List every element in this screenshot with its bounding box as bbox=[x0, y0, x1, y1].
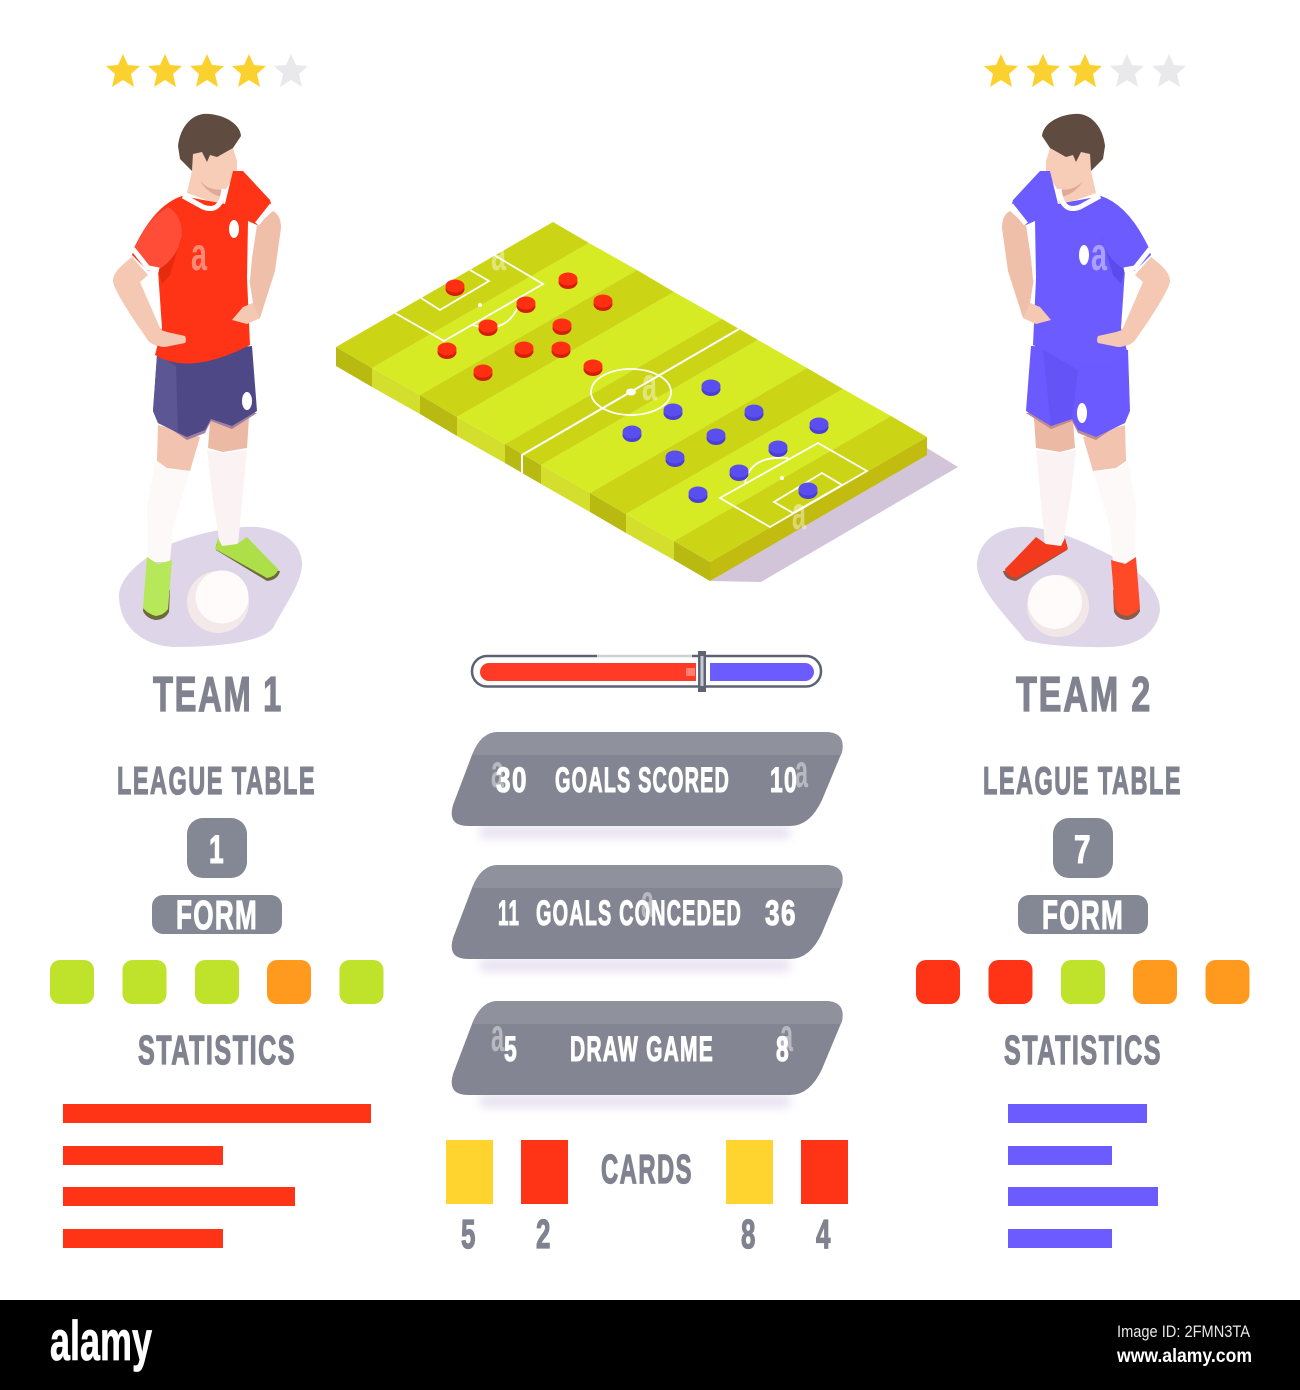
stat row: goals scored: 10 bbox=[770, 761, 798, 800]
shirt bbox=[1011, 171, 1151, 363]
heading: team 1: TEAM 1 bbox=[153, 668, 283, 722]
cards: team 2 yellow bbox=[726, 1140, 773, 1204]
arms bbox=[113, 257, 186, 346]
panel: team 1 stats bbox=[50, 760, 384, 1248]
heading: team 2: TEAM 2 bbox=[1016, 668, 1152, 722]
footer logo: alamy bbox=[50, 1309, 152, 1372]
ground shadow bbox=[977, 527, 1160, 647]
form pill bbox=[152, 892, 282, 938]
cards heading: CARDS bbox=[601, 1146, 693, 1192]
legs bbox=[1083, 425, 1126, 471]
form pill bbox=[1018, 892, 1148, 938]
pitch shadow bbox=[710, 448, 958, 582]
watermark letter on blue shirt: a bbox=[1091, 228, 1107, 280]
boots bbox=[143, 537, 280, 620]
stat row: goals scored: a bbox=[491, 745, 504, 797]
shirt bbox=[132, 171, 272, 363]
watermark letters on pitch: a bbox=[642, 358, 657, 410]
neck and face bbox=[1046, 140, 1096, 206]
pitch markings bbox=[395, 255, 867, 527]
blue team tokens bbox=[622, 380, 828, 503]
card counts: 8 bbox=[741, 1211, 757, 1257]
cards: team 1 yellow bbox=[446, 1140, 493, 1204]
pitch front side wall bbox=[336, 347, 927, 581]
stat row: draw game: a bbox=[491, 1009, 504, 1061]
stat row: goals conceded bbox=[452, 865, 843, 971]
statistics heading: STATISTICS bbox=[138, 1027, 296, 1073]
stat row: goals scored: a bbox=[795, 745, 808, 797]
cards: team 2 red bbox=[801, 1140, 848, 1204]
hair bbox=[178, 114, 241, 171]
hands on shirt bbox=[150, 303, 260, 347]
pitch grass stripes bbox=[336, 222, 927, 562]
stat row: goals conceded: GOALS CONCEDED bbox=[536, 894, 742, 933]
stat row: goals conceded: 11 bbox=[498, 894, 520, 933]
hair bbox=[1042, 114, 1105, 171]
stat row: goals conceded: a bbox=[641, 875, 654, 927]
footer bar bbox=[0, 1300, 1300, 1390]
image id: Image ID: 2FMN3TA bbox=[1117, 1322, 1251, 1341]
card counts: 2 bbox=[536, 1211, 552, 1257]
hands on shirt bbox=[1023, 303, 1133, 347]
league position badge bbox=[1053, 818, 1113, 878]
stat row: goals conceded: 36 bbox=[765, 894, 797, 933]
player: team 2 in blue kit bbox=[977, 114, 1170, 647]
form pill: FORM bbox=[1042, 892, 1124, 938]
ground shadow bbox=[119, 527, 302, 647]
stat row: draw game bbox=[452, 1001, 843, 1107]
form squares bbox=[916, 960, 1250, 1004]
card counts: 4 bbox=[816, 1211, 832, 1257]
socks bbox=[147, 462, 190, 562]
rating stars: team 2 bbox=[984, 54, 1186, 87]
figure mirrored from the team 1 pose bbox=[1002, 114, 1170, 620]
statistics bars bbox=[63, 1104, 371, 1248]
watermark letters on pitch: a bbox=[491, 228, 506, 280]
isometric football pitch with formation tokens bbox=[336, 222, 958, 582]
watermark letters on pitch: a bbox=[792, 487, 806, 539]
stat row: draw game: DRAW GAME bbox=[570, 1030, 714, 1069]
league position badge bbox=[187, 818, 247, 878]
watermark letter on red shirt: a bbox=[191, 228, 207, 280]
rating stars: team 1 bbox=[106, 54, 308, 87]
shorts bbox=[158, 410, 257, 440]
cards: team 1 red bbox=[521, 1140, 568, 1204]
ball bbox=[187, 570, 249, 633]
player: team 1 in red kit bbox=[113, 114, 302, 647]
watermark letters on pitch bbox=[491, 228, 806, 539]
socks bbox=[1093, 462, 1136, 562]
card counts bbox=[461, 1211, 832, 1257]
stat row: draw game: a bbox=[780, 1009, 793, 1061]
red team tokens bbox=[438, 272, 612, 381]
website: www.alamy.com bbox=[1116, 1346, 1252, 1367]
form squares bbox=[50, 960, 384, 1004]
league table heading: LEAGUE TABLE bbox=[117, 760, 316, 803]
legs bbox=[157, 425, 200, 471]
stat row: draw game: 8 bbox=[776, 1030, 790, 1069]
neck and face bbox=[187, 140, 237, 206]
shorts bbox=[1026, 410, 1125, 440]
ball bbox=[1027, 575, 1089, 637]
stat row: goals scored: GOALS SCORED bbox=[555, 761, 730, 800]
arms bbox=[1097, 257, 1170, 346]
boots bbox=[1003, 537, 1140, 620]
stat row: goals scored: 30 bbox=[496, 761, 528, 800]
league position badge: 7 bbox=[1074, 828, 1092, 872]
form pill: FORM bbox=[176, 892, 258, 938]
stat row: draw game: 5 bbox=[504, 1030, 518, 1069]
panel: team 2 stats bbox=[916, 760, 1250, 1248]
statistics heading: STATISTICS bbox=[1004, 1027, 1162, 1073]
statistics bars bbox=[1008, 1104, 1158, 1248]
league position badge: 1 bbox=[209, 828, 225, 872]
possession bar bbox=[472, 651, 821, 692]
card counts: 5 bbox=[461, 1211, 477, 1257]
stat row: goals scored bbox=[452, 732, 843, 838]
